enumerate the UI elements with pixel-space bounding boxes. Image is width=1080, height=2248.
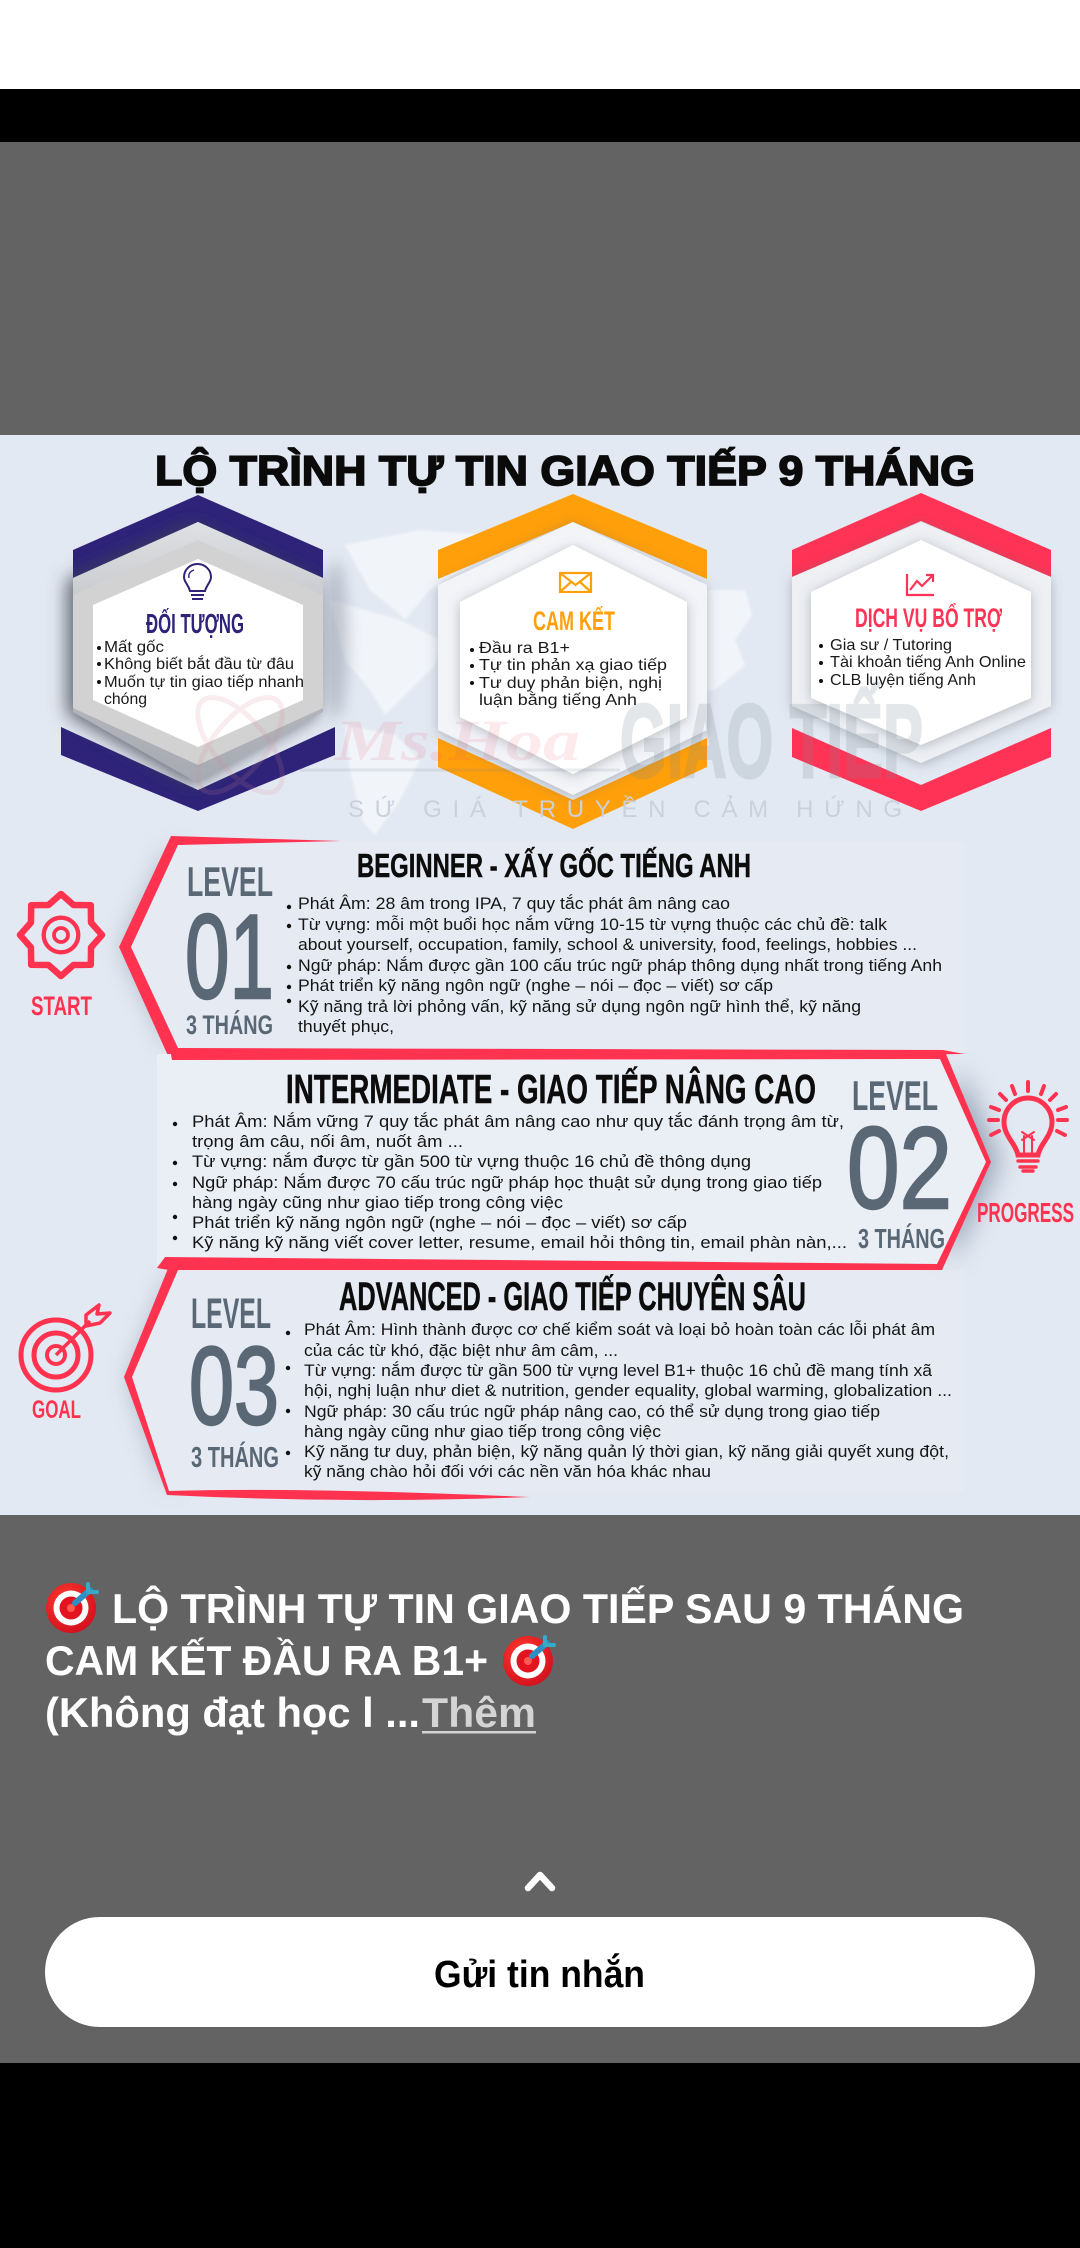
duration: 3 THÁNG bbox=[191, 1440, 279, 1474]
list: dịch vụ bổ trợ: CLB luyện tiếng Anh bbox=[830, 672, 976, 689]
heading: cam kết: CAM KẾT bbox=[533, 605, 615, 636]
orange bottom chevron bbox=[438, 738, 707, 829]
gear outline bbox=[20, 894, 102, 976]
list: cam kết: Tự tin phản xạ giao tiếp bbox=[479, 657, 667, 674]
panel: cam kết bbox=[438, 494, 707, 829]
caption line 1: LỘ TRÌNH TỰ TIN GIAO TIẾP SAU 9 THÁNG bbox=[112, 1584, 964, 1632]
panel fill bbox=[157, 1054, 989, 1268]
heading: dịch vụ bổ trợ: DỊCH VỤ BỔ TRỢ bbox=[855, 602, 1002, 633]
list: Từ vựng: mỗi một buổi học nắm vững 10-15 từ vựng thuộc các chủ đề: talk bbox=[298, 915, 888, 934]
caption line 2: CAM KẾT ĐẦU RA B1+ bbox=[45, 1637, 488, 1684]
list: Kỹ năng tư duy, phản biện, kỹ năng quản lý thời gian, kỹ năng giải quyết xung đột, bbox=[304, 1442, 949, 1461]
panel fill bbox=[132, 1270, 964, 1492]
panel: dịch vụ bổ trợ bbox=[792, 493, 1051, 811]
red frame bbox=[124, 1266, 530, 1500]
list: Phát Âm: 28 âm trong IPA, 7 quy tắc phát âm nâng cao bbox=[298, 894, 730, 913]
list: đối tượng: Muốn tự tin giao tiếp nhanh bbox=[104, 674, 304, 691]
emoji: target 1 bbox=[46, 1583, 97, 1633]
level number: 03 bbox=[189, 1325, 279, 1448]
list: Kỹ năng kỹ năng viết cover letter, resume, email hỏi thông tin, email phàn nàn,... bbox=[192, 1233, 847, 1252]
arrow bbox=[56, 1321, 90, 1355]
hexagon ring bbox=[438, 522, 707, 795]
white hexagon bbox=[460, 545, 687, 774]
list: Phát Âm: Nắm vững 7 quy tắc phát âm nâng cao như quy tắc đánh trọng âm từ, bbox=[192, 1112, 844, 1131]
white hexagon bbox=[93, 559, 303, 747]
list: Kỹ năng trả lời phỏng vấn, kỹ năng sử dụng ngôn ngữ hình thể, kỹ năng bbox=[298, 997, 861, 1016]
panel fill bbox=[125, 842, 964, 1054]
list: Ngữ pháp: Nắm được 70 cấu trúc ngữ pháp học thuật sử dụng trong giao tiếp bbox=[192, 1173, 822, 1192]
red frame bbox=[119, 836, 964, 1058]
list: cam kết bbox=[470, 640, 667, 709]
panel shadow bbox=[125, 845, 200, 1050]
list: cam kết: Đầu ra B1+ bbox=[479, 640, 570, 657]
list: dịch vụ bổ trợ: Tài khoản tiếng Anh Online bbox=[830, 654, 1026, 671]
gray outer hexagon bbox=[73, 522, 323, 783]
bottom black band bbox=[0, 2063, 1080, 2248]
list: Ngữ pháp: 30 cấu trúc ngữ pháp nâng cao, có thể sử dụng trong giao tiếp bbox=[304, 1402, 880, 1421]
level number: 01 bbox=[185, 890, 274, 1024]
duration: 3 THÁNG bbox=[858, 1223, 945, 1254]
panel: level 03 advanced bbox=[124, 1266, 964, 1500]
heading: BEGINNER - XẤY GỐC TIẾNG ANH bbox=[357, 846, 751, 884]
list bbox=[173, 1112, 847, 1252]
gray inner hexagon bbox=[73, 540, 323, 765]
list: about yourself, occupation, family, school & university, food, feelings, hobbies ... bbox=[298, 935, 917, 954]
panel shadow bbox=[930, 1070, 1000, 1262]
navy bottom chevron bbox=[61, 727, 335, 811]
orange top chevron bbox=[438, 494, 707, 579]
icon: light bulb bbox=[184, 564, 211, 599]
icon: goal target bbox=[21, 1305, 110, 1390]
panel shadow bbox=[132, 1270, 200, 1490]
heading: INTERMEDIATE - GIAO TIẾP NÂNG CAO bbox=[286, 1066, 816, 1112]
list: trọng âm câu, nối âm, nuốt âm ... bbox=[192, 1132, 463, 1151]
red top chevron bbox=[792, 493, 1051, 577]
list: Từ vựng: nắm được từ gần 500 từ vựng thuộc 16 chủ đề thông dụng bbox=[192, 1152, 751, 1171]
list bbox=[286, 1320, 952, 1481]
list: hàng ngày cũng như giao tiếp trong công việc bbox=[192, 1193, 564, 1212]
list: cam kết: luận bằng tiếng Anh bbox=[479, 690, 637, 709]
top black band bbox=[0, 89, 1080, 142]
bulb body bbox=[1004, 1098, 1052, 1155]
list bbox=[287, 894, 942, 1036]
watermark logo bbox=[183, 684, 620, 806]
duration: 3 THÁNG bbox=[186, 1009, 273, 1040]
level label: LEVEL bbox=[852, 1072, 938, 1119]
infographic panel background bbox=[0, 435, 1080, 1515]
red frame bbox=[157, 1049, 991, 1270]
title: LỘ TRÌNH TỰ TIN GIAO TIẾP 9 THÁNG bbox=[155, 446, 975, 494]
button: send message bbox=[45, 1917, 1035, 2027]
heading: ADVANCED - GIAO TIẾP CHUYÊN SÂU bbox=[339, 1273, 806, 1319]
list: Phát Âm: Hình thành được cơ chế kiểm soát và loại bỏ hoàn toàn các lỗi phát âm bbox=[304, 1320, 935, 1339]
panel: level 02 intermediate bbox=[157, 1049, 1000, 1270]
filament bbox=[1022, 1132, 1034, 1154]
icon: progress bulb bbox=[989, 1082, 1067, 1171]
bulb base bbox=[1018, 1161, 1038, 1171]
list: hàng ngày cũng như giao tiếp trong công việc bbox=[304, 1422, 662, 1441]
target rings bbox=[21, 1320, 91, 1390]
level label: LEVEL bbox=[187, 858, 273, 905]
level label: LEVEL bbox=[191, 1290, 271, 1338]
icon: chevron up bbox=[528, 1875, 552, 1888]
status bar: white strip bbox=[0, 0, 1080, 89]
more link: Thêm bbox=[422, 1689, 536, 1736]
label: goal: GOAL bbox=[32, 1396, 81, 1424]
list: dịch vụ bổ trợ bbox=[819, 637, 1026, 689]
list: Từ vựng: nắm được từ gần 500 từ vựng level B1+ thuộc 16 chủ đề mang tính xã bbox=[304, 1361, 933, 1380]
list: Phát triển kỹ năng ngôn ngữ (nghe – nói – đọc – viết) sơ cấp bbox=[298, 976, 773, 995]
list: dịch vụ bổ trợ: Gia sư / Tutoring bbox=[830, 637, 952, 654]
icon: growth chart bbox=[907, 574, 934, 595]
emoji: target 2 bbox=[503, 1636, 554, 1686]
list: đối tượng: Không biết bắt đầu từ đâu bbox=[104, 654, 294, 673]
list: cam kết: Tư duy phản biện, nghị bbox=[479, 675, 662, 692]
icon: start gear bbox=[20, 894, 102, 976]
panel: level 01 beginner bbox=[119, 836, 964, 1058]
watermark: brand bbox=[183, 684, 923, 823]
white hexagon bbox=[811, 540, 1031, 745]
rays bbox=[989, 1082, 1067, 1135]
list: kỹ năng chào hỏi đối với các nền văn hóa khác nhau bbox=[304, 1462, 711, 1481]
label: start: START bbox=[31, 991, 92, 1021]
list: thuyết phục, bbox=[298, 1017, 394, 1036]
level number: 02 bbox=[847, 1103, 952, 1233]
hexagon ring bbox=[792, 522, 1051, 763]
heading: đối tượng: ĐỐI TƯỢNG bbox=[146, 607, 244, 639]
red bottom chevron bbox=[792, 728, 1051, 811]
caption line 3: (Không đạt học l ... bbox=[45, 1689, 420, 1736]
gear rings bbox=[44, 918, 78, 952]
list: đối tượng: chóng bbox=[104, 691, 147, 708]
list: đối tượng bbox=[97, 639, 304, 708]
watermark tagline: SỨ GIÁ TRUYỀN CẢM HỨNG bbox=[348, 794, 902, 823]
list: đối tượng: Mất gốc bbox=[104, 639, 164, 656]
navy top chevron bbox=[73, 495, 323, 578]
button: send message: Gửi tin nhắn bbox=[434, 1952, 645, 1996]
caption bbox=[45, 1583, 964, 1736]
list: Ngữ pháp: Nắm được gần 100 cấu trúc ngữ pháp thông dụng nhất trong tiếng Anh bbox=[298, 956, 942, 975]
list: Phát triển kỹ năng ngôn ngữ (nghe – nói – đọc – viết) sơ cấp bbox=[192, 1213, 687, 1232]
world map watermark bbox=[330, 530, 752, 835]
watermark script: Ms.Hoa bbox=[334, 708, 580, 773]
icon: envelope bbox=[560, 573, 591, 592]
panel: đối tượng bbox=[61, 495, 335, 811]
list: của các từ khó, đặc biệt như âm câm, ... bbox=[304, 1341, 618, 1360]
list: hội, nghị luận như diet & nutrition, gender equality, global warming, globalization ... bbox=[304, 1381, 952, 1400]
